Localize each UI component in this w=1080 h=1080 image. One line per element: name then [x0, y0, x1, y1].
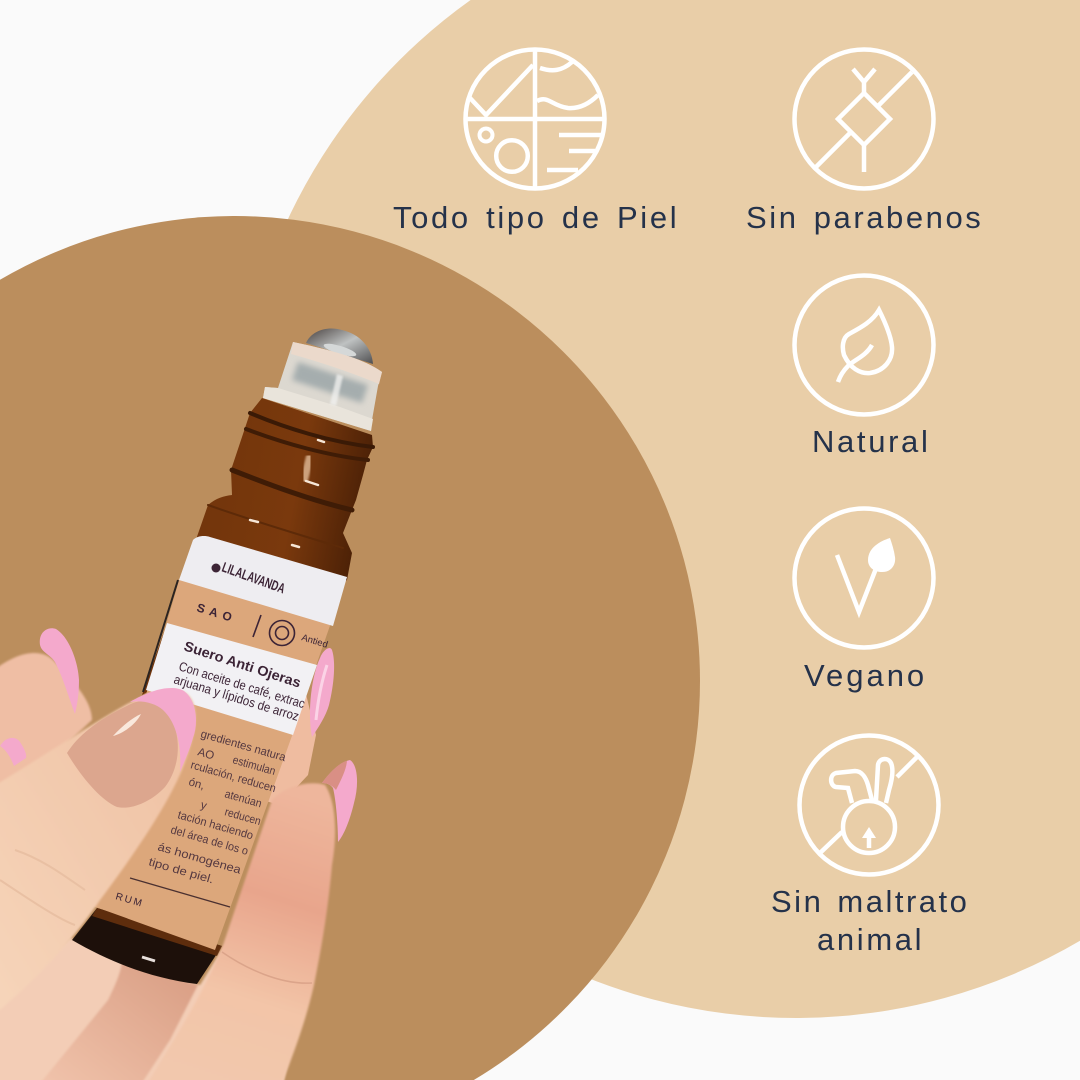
icon: crossed rabbit [800, 736, 938, 874]
background circle: tan [0, 216, 700, 1080]
label body copy: ás homogénea [156, 841, 243, 877]
finger behind bottle, left [0, 628, 92, 790]
label body copy: rculación, reducen [189, 759, 277, 795]
label product name: Suero Anti Ojeras [182, 638, 303, 691]
finger behind bottle, right [262, 648, 334, 805]
label: Sin maltrato [771, 884, 969, 919]
label: Todo tipo de Piel [393, 200, 679, 235]
label: Natural [812, 424, 930, 459]
icon: skin types [466, 50, 604, 188]
label: Vegano [804, 658, 927, 693]
icon: no parabens [794, 50, 934, 188]
label body copy: ón, [187, 776, 206, 792]
amber glass body [142, 398, 373, 695]
label body copy: atenúan [223, 788, 263, 810]
label subtitle: arjuana y lípidos de arroz [172, 672, 301, 724]
label: Sin parabenos [746, 200, 983, 235]
icon: leaf [794, 276, 934, 414]
label brand icon [212, 564, 220, 572]
label body copy [147, 728, 288, 886]
label subtitle: Con aceite de café, extrac [177, 659, 307, 711]
badge: Vegano [794, 508, 934, 693]
label claim: Antied [300, 632, 329, 651]
thumb nail highlight [113, 714, 141, 736]
label body copy: estimulan [231, 754, 277, 778]
label body copy: del área de los o [169, 824, 249, 858]
badge: Natural [794, 276, 934, 459]
steel roller ball [306, 329, 373, 364]
background circle: light beige [235, 0, 1080, 1018]
label SERUM: RUM [114, 891, 145, 910]
front finger, right [146, 760, 357, 1080]
badge: Todo tipo de Piel [393, 50, 679, 235]
palm [0, 938, 300, 1080]
label divider and icon [253, 615, 294, 646]
label body copy: tipo de piel. [147, 856, 215, 886]
label rule [130, 878, 230, 907]
photo: hand holding roller bottle [0, 329, 382, 1080]
product label: tan paper [90, 577, 347, 950]
badge: Sin maltrato animal [771, 736, 969, 957]
label body copy: reducen [223, 806, 262, 828]
bottle edge line [143, 580, 178, 692]
label SAO: SAO [195, 600, 238, 626]
product label: white title band [146, 623, 317, 735]
label body copy: gredientes natura [199, 728, 288, 764]
icon: vegan V with leaf [794, 508, 934, 648]
product label: white header [179, 536, 347, 626]
label body copy: tación haciendo [176, 809, 254, 842]
thumb nail bed [67, 701, 178, 808]
label body copy: AO [196, 746, 216, 762]
roller bottle [72, 329, 382, 984]
thumb nail pink tip [130, 688, 196, 772]
dark glass base [72, 908, 222, 984]
plastic roller cap [263, 342, 382, 431]
badge: Sin parabenos [746, 50, 983, 235]
label brand: LILALAVANDA [220, 559, 287, 596]
thumb [0, 688, 196, 1015]
label second line: animal [817, 922, 924, 957]
glass threads and highlights [208, 413, 373, 548]
label body copy: y [199, 799, 208, 813]
